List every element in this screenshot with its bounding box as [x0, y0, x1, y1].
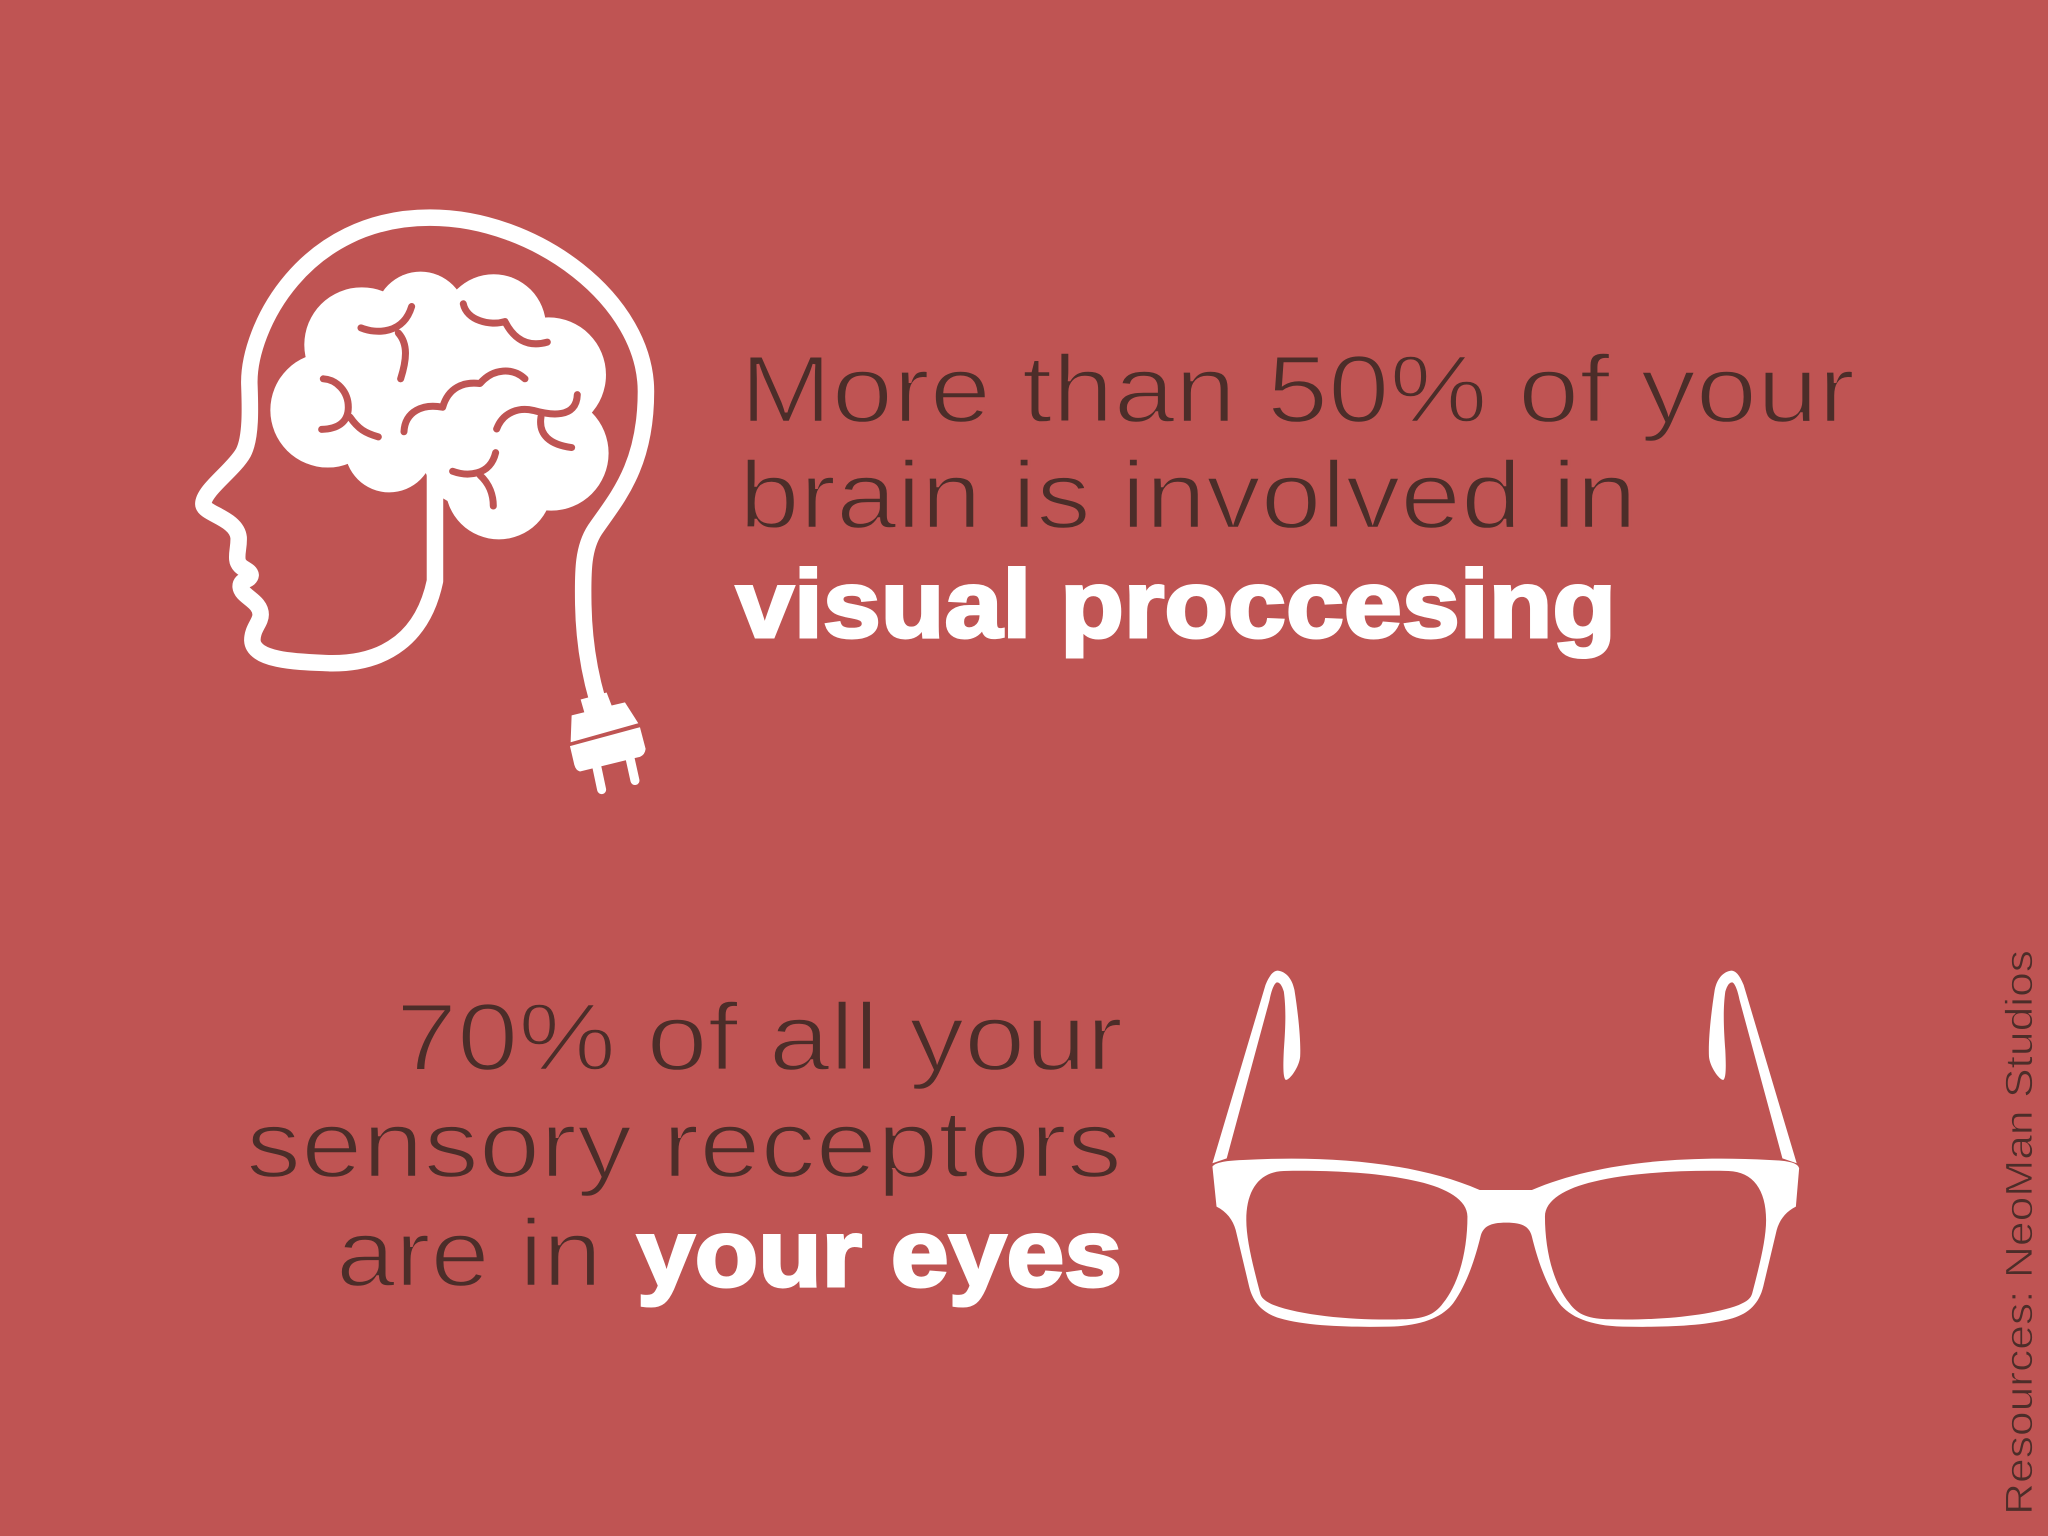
glasses frame — [1212, 1159, 1799, 1327]
brain — [270, 272, 609, 539]
text block: brain statistic: brain is involved in — [739, 442, 1637, 549]
text block: eye statistic: your eyes — [637, 1200, 1122, 1307]
text block: eye statistic: 70% of all your — [396, 984, 1123, 1091]
text block: brain statistic — [736, 336, 1855, 658]
head outline and cord — [203, 218, 646, 700]
text block: eye statistic — [246, 984, 1123, 1307]
text block: eye statistic: sensory receptors — [246, 1091, 1122, 1198]
icon: head outline with brain and plug — [203, 218, 646, 790]
icon: glasses — [1212, 971, 1799, 1327]
brain folds — [322, 304, 577, 506]
text block: eye statistic: are in — [336, 1200, 602, 1307]
text block: brain statistic: More than 50% of your — [740, 336, 1855, 443]
source credit: Resources: NeoMan Studios — [1999, 950, 2041, 1515]
plug — [570, 692, 646, 790]
left temple arm — [1212, 971, 1300, 1163]
text block: brain statistic: visual proccesing — [736, 551, 1616, 658]
right temple arm — [1709, 971, 1797, 1163]
